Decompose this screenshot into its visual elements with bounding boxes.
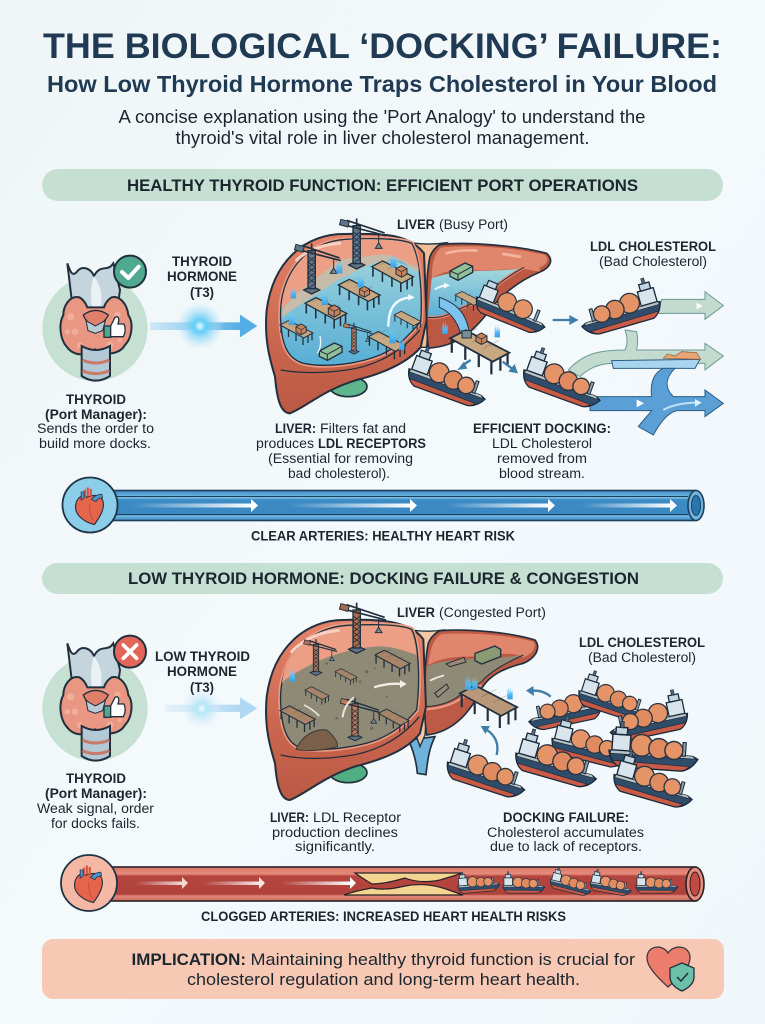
- right lobe: [427, 244, 551, 348]
- illustration: liver as busy port: [266, 218, 551, 413]
- cutaway congested port: [281, 625, 419, 749]
- section banner: healthy: HEALTHY THYROID FUNCTION: EFFICIENT PORT OPERATIONS: [127, 177, 638, 195]
- intro text: [118, 107, 646, 148]
- text: thyroid port manager: (Port Manager):: [45, 407, 147, 422]
- text: liver decline: [270, 810, 402, 854]
- cranes: [304, 639, 337, 676]
- text: docking failure: Cholesterol accumulates: [487, 825, 644, 840]
- text: thyroid port manager: [37, 392, 154, 451]
- label: thyroid hormone: HORMONE: [167, 269, 237, 284]
- section banner: healthy: [42, 169, 723, 201]
- label: low thyroid hormone: HORMONE: [167, 664, 237, 679]
- icon: healthy heart: [62, 478, 118, 532]
- ships: congested LDL cholesterol: [443, 668, 700, 811]
- panel: low thyroid hormone: [37, 563, 723, 924]
- text: thyroid port manager: THYROID: [66, 392, 126, 407]
- mound of debris: [296, 730, 337, 751]
- left lobe: [266, 620, 426, 800]
- title: THE BIOLOGICAL ‘DOCKING’ FAILURE:: [43, 27, 722, 66]
- text: docking failure: DOCKING FAILURE:: [503, 810, 629, 825]
- text: liver function: [256, 421, 426, 481]
- label: LDL cholesterol congested: LDL CHOLESTEROL: [579, 635, 705, 650]
- text: thyroid weak signal: for docks fails.: [51, 816, 140, 831]
- outer pier: [460, 684, 517, 728]
- ships leaving the liver: [404, 279, 553, 410]
- arrows: blocked ships trying to dock: [481, 686, 551, 755]
- callout: implication: [42, 939, 724, 999]
- text: efficient docking: [473, 421, 611, 481]
- intro text: A concise explanation using the 'Port Analogy' to understand the: [118, 107, 646, 127]
- text: efficient docking: LDL Cholesterol: [492, 436, 592, 451]
- intro text: thyroid's vital role in liver cholesterol management.: [176, 128, 590, 148]
- text: thyroid weak signal: (Port Manager):: [45, 786, 147, 801]
- arrows: removal flow: [457, 292, 723, 435]
- illustration: liver as congested port: [266, 603, 538, 800]
- text: docking failure: [487, 810, 644, 854]
- caption: clogged arteries: CLOGGED ARTERIES: INCREASED HEART HEALTH RISKS: [201, 909, 566, 924]
- text: thyroid port manager: Sends the order to: [37, 421, 154, 436]
- label: low thyroid hormone: LOW THYROID: [155, 649, 250, 664]
- icon: healthy thyroid with check badge: [42, 256, 148, 381]
- label: liver congested port: LIVER: [397, 605, 435, 620]
- neck between lobes: [402, 241, 447, 347]
- gallbladder: [330, 763, 367, 783]
- caption: clear arteries: CLEAR ARTERIES: HEALTHY HEART RISK: [251, 528, 515, 544]
- neck between lobes: [400, 627, 443, 747]
- callout: implication: cholesterol regulation and long-term heart health.: [187, 970, 580, 989]
- text: liver decline: LIVER:: [270, 810, 309, 825]
- blue docking sparks: [291, 284, 296, 298]
- text: liver decline: significantly.: [295, 839, 375, 854]
- damaged piers: [280, 705, 315, 732]
- label: liver busy port: LIVER: [397, 217, 435, 232]
- faint flow arrows: [374, 684, 402, 687]
- plaque build-up: [355, 873, 463, 884]
- flow arrows: [388, 297, 412, 327]
- label: LDL cholesterol congested: [579, 635, 705, 665]
- crates: [328, 305, 340, 317]
- arrow: strong hormone signal: [150, 302, 257, 350]
- label: thyroid hormone: THYROID: [172, 254, 232, 269]
- cutaway port: [281, 239, 421, 365]
- label: LDL cholesterol congested: (Bad Cholesterol): [588, 650, 696, 665]
- right lobe piers and chute: [455, 291, 481, 311]
- callout: implication: Maintaining healthy thyroid function is crucial for: [250, 950, 635, 969]
- subtitle: How Low Thyroid Hormone Traps Cholesterol in Your Blood: [47, 71, 717, 97]
- label: low thyroid hormone: [155, 649, 250, 695]
- section banner: low thyroid: LOW THYROID HORMONE: DOCKING FAILURE & CONGESTION: [128, 570, 639, 588]
- text: docking failure: due to lack of receptors.: [490, 839, 642, 854]
- text: efficient docking: EFFICIENT DOCKING:: [473, 421, 611, 436]
- label: LDL cholesterol: [590, 239, 716, 269]
- label: liver busy port: [397, 217, 508, 232]
- label: liver congested port: (Congested Port): [439, 605, 546, 620]
- text: efficient docking: blood stream.: [499, 466, 585, 481]
- callout: implication: IMPLICATION:: [132, 950, 246, 969]
- artery: clogged red tube: [110, 866, 704, 901]
- arrow: weak hormone signal: [165, 688, 257, 729]
- label: liver congested port: [397, 605, 546, 620]
- text: liver function: Filters fat and: [320, 421, 406, 436]
- text: liver function: (Essential for removing: [268, 451, 413, 466]
- text: efficient docking: removed from: [497, 451, 587, 466]
- text: liver function: produces: [256, 436, 314, 451]
- icon: strained heart: [61, 855, 117, 911]
- panel: healthy thyroid function: [37, 169, 723, 544]
- text: liver function: LIVER:: [275, 421, 316, 436]
- text: thyroid weak signal: [37, 771, 155, 831]
- text: liver decline: LDL Receptor: [313, 810, 402, 825]
- left lobe: [266, 234, 427, 413]
- label: thyroid hormone: [167, 254, 237, 300]
- label: LDL cholesterol: (Bad Cholesterol): [599, 254, 707, 269]
- portal vein: [408, 737, 435, 775]
- icon: low thyroid with X badge: [42, 636, 148, 761]
- text: thyroid port manager: build more docks.: [39, 436, 151, 451]
- text: liver function: bad cholesterol).: [288, 466, 390, 481]
- label: thyroid hormone: (T3): [190, 285, 214, 300]
- artery: clear blue tube: [110, 490, 704, 520]
- text: liver function: LDL RECEPTORS: [318, 436, 426, 451]
- label: LDL cholesterol: LDL CHOLESTEROL: [590, 239, 716, 254]
- right lobe: [425, 630, 538, 735]
- label: low thyroid hormone: (T3): [190, 680, 214, 695]
- icon: heart with shield: [647, 947, 694, 991]
- piers: [280, 319, 313, 345]
- gallbladder: [330, 377, 367, 397]
- ships: LDL cholesterol: [519, 275, 664, 411]
- label: liver busy port: (Busy Port): [439, 217, 508, 232]
- text: thyroid weak signal: Weak signal, order: [37, 801, 155, 816]
- cranes: [294, 243, 341, 294]
- text: thyroid weak signal: THYROID: [66, 771, 126, 786]
- section banner: low thyroid: [42, 563, 723, 594]
- text: liver decline: production declines: [272, 825, 398, 840]
